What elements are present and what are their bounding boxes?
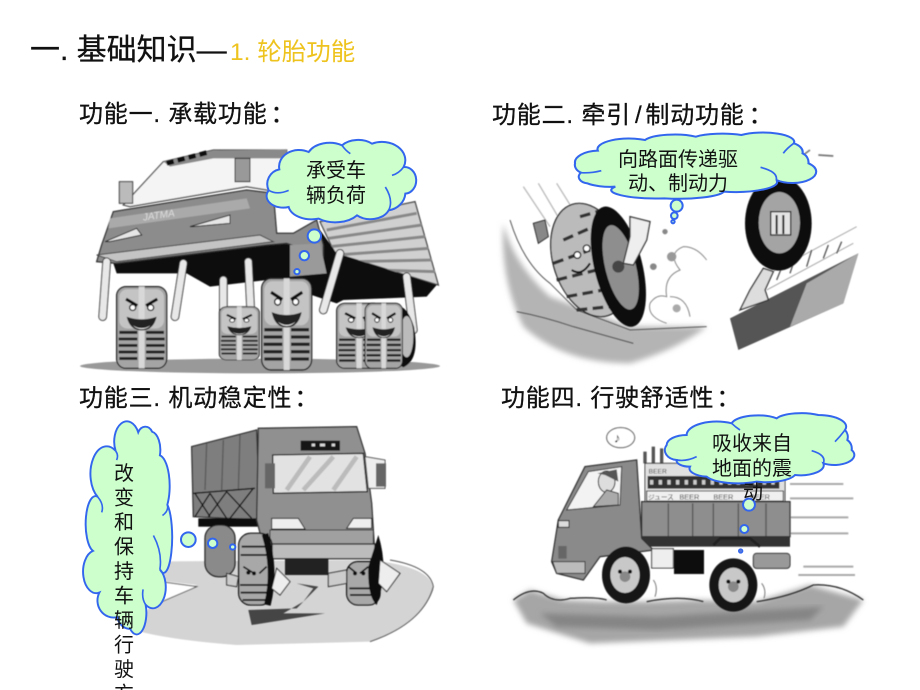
callout: transmitting drive and braking force: 动、制动力 [628,172,728,195]
heading: function three: 功能三. 机动稳定性： [79,378,319,413]
illustration: truck carrying beer over a bumpy road [513,428,863,643]
callout: bearing the vehicle load: 辆负荷 [306,184,366,207]
illustration: tires climbing and braking on slopes [503,150,858,363]
callout: absorbing road vibration [665,413,854,553]
callout: changing and keeping driving direction [83,421,235,690]
callout: bearing the vehicle load: 承受车 [306,159,366,182]
callout: absorbing road vibration: 地面的震 [712,457,792,480]
callout: absorbing road vibration: 吸收来自 [712,432,792,455]
title: 一. 基础知识— [30,34,227,67]
illustration: truck carrying beer over a bumpy road: BEER [713,492,733,501]
callout: changing and keeping driving direction: 辆 [114,609,134,632]
heading: function two: 功能二. 牵引/制动功能： [492,95,773,130]
illustration: truck carrying beer over a bumpy road: BEER [750,492,770,501]
callout: changing and keeping driving direction: 持 [114,560,134,583]
illustration: truck lifted by tires: JATMA [141,208,176,224]
callout: absorbing road vibration: 动 [743,481,763,504]
illustration: truck carrying beer over a bumpy road: ジュース [648,493,674,501]
heading: function one: 功能一. 承载功能： [79,94,295,129]
callout: changing and keeping driving direction: 变 [114,486,134,510]
heading: function four: 功能四. 行驶舒适性： [501,378,741,413]
illustration: truck carrying beer over a bumpy road: ♪ [614,430,621,445]
callout: changing and keeping driving direction: 和 [114,511,134,534]
callout: transmitting drive and braking force [575,133,816,223]
callout: transmitting drive and braking force: 向路面传递驱 [618,148,738,171]
callout: changing and keeping driving direction: 改 [114,462,134,485]
illustration: truck steering on curved road [133,427,433,645]
callout: bearing the vehicle load [267,140,416,274]
callout: changing and keeping driving direction: 车 [114,584,134,608]
illustration: truck carrying beer over a bumpy road: BEER [649,468,667,475]
illustration: truck lifted by tires [80,149,440,373]
callout: changing and keeping driving direction: 保 [114,536,134,558]
title: 1. 轮胎功能 [230,38,355,66]
callout: changing and keeping driving direction: 行 [114,634,134,656]
title [30,34,355,67]
callout: changing and keeping driving direction: 驶 [114,658,134,681]
illustration: truck carrying beer over a bumpy road: BEER [679,492,699,501]
